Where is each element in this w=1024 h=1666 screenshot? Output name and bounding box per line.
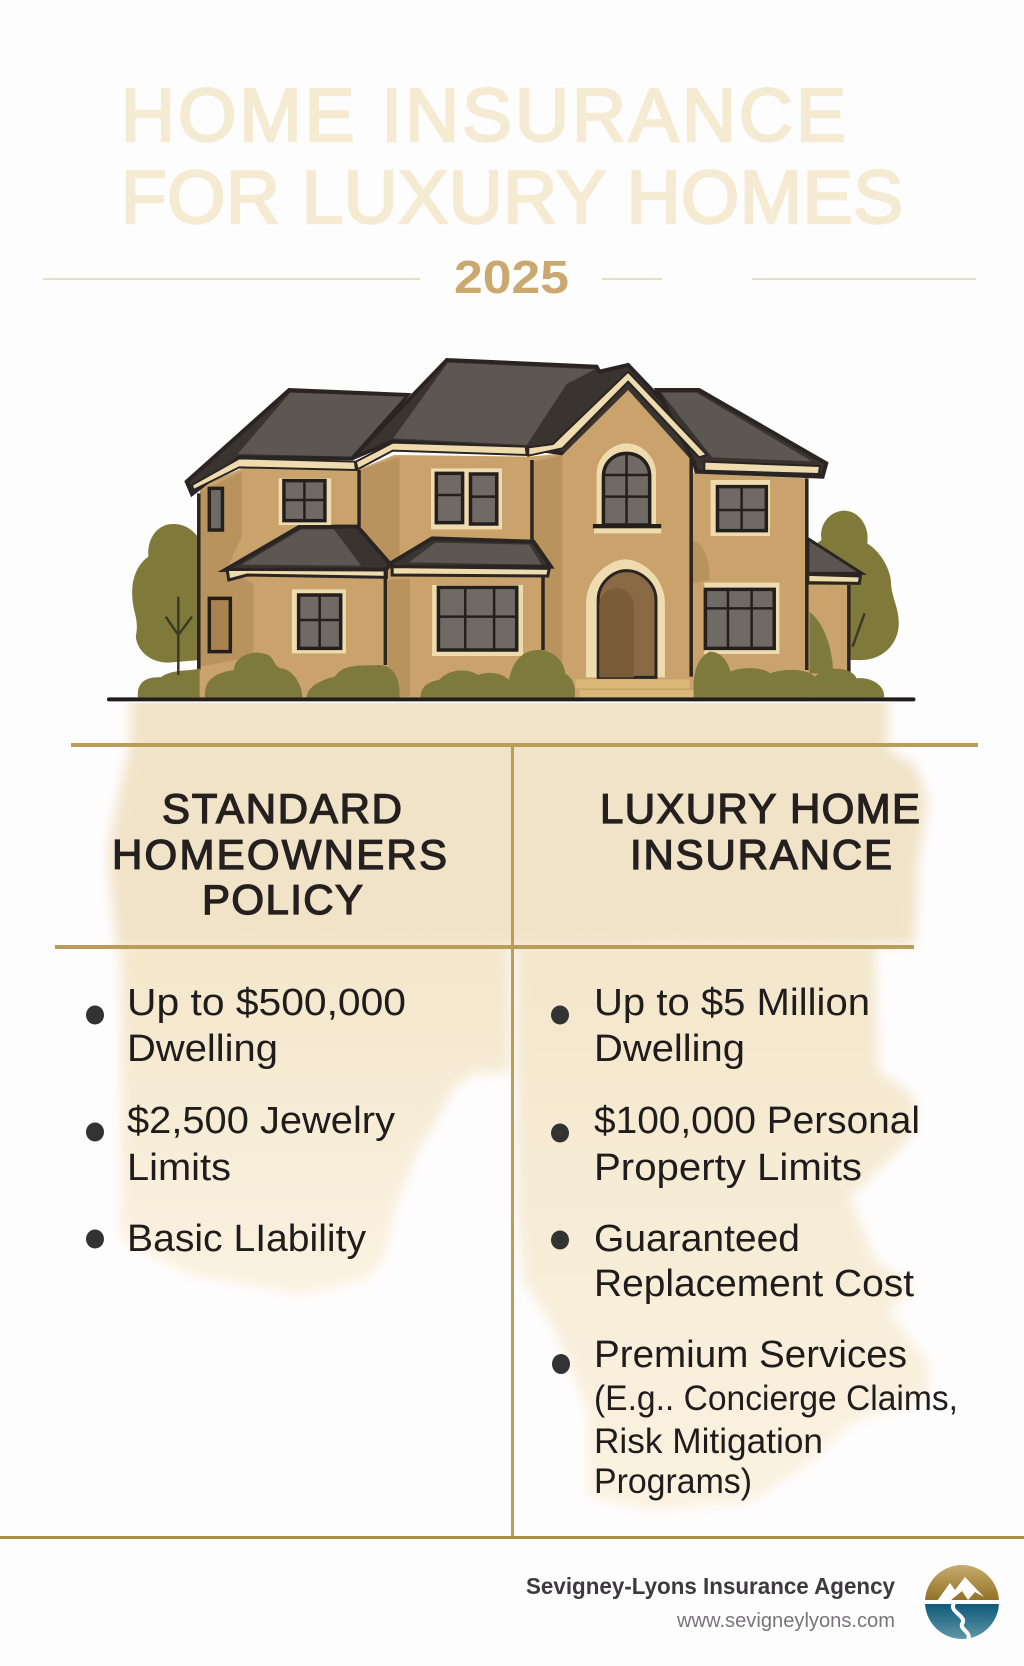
- shrubs: [138, 650, 884, 697]
- cream brush background: [108, 695, 928, 1510]
- right side roof: [808, 539, 862, 573]
- column heading: standard homeowners policy: HOMEOWNERS: [112, 831, 447, 878]
- tree trunks: [166, 597, 865, 675]
- luxury insurance list: Replacement Cost: [594, 1263, 914, 1305]
- column heading: luxury home insurance: LUXURY HOME: [600, 785, 920, 832]
- column heading: luxury home insurance: [600, 785, 920, 878]
- cream window surrounds: [279, 468, 779, 656]
- luxury insurance list: Programs): [594, 1462, 752, 1501]
- lower middle roof: [392, 538, 551, 567]
- column heading: standard homeowners policy: POLICY: [202, 876, 363, 923]
- left tree: [132, 524, 200, 663]
- luxury insurance list: Property Limits: [594, 1147, 862, 1189]
- front door: [586, 559, 665, 677]
- wall shading: [200, 455, 710, 697]
- year subtitle with flanking rules: 2025: [454, 251, 569, 303]
- window muntins: [284, 481, 774, 650]
- gable wall: [562, 390, 691, 677]
- windows: [209, 473, 774, 652]
- footer agency text: Sevigney-Lyons Insurance Agency: [526, 1573, 895, 1599]
- title: FOR LUXURY HOMES: [121, 155, 903, 239]
- standard policy list: Dwelling: [127, 1028, 278, 1070]
- column heading: luxury home insurance: INSURANCE: [630, 831, 892, 878]
- standard policy list: Up to $500,000: [127, 982, 406, 1024]
- roof trim: [192, 372, 820, 490]
- luxury insurance list: Premium Services: [594, 1334, 907, 1376]
- standard policy list: [86, 982, 406, 1260]
- wall outlines: [199, 457, 849, 677]
- standard policy list: Basic LIability: [127, 1218, 366, 1260]
- luxury insurance list: $100,000 Personal: [594, 1100, 920, 1142]
- front steps: [576, 679, 702, 697]
- footer agency text: [526, 1573, 895, 1632]
- luxury insurance list: (E.g.. Concierge Claims,: [594, 1379, 958, 1418]
- luxury insurance list: Risk Mitigation: [594, 1422, 823, 1461]
- title: HOME INSURANCE: [121, 73, 846, 157]
- standard policy list: Limits: [127, 1147, 231, 1189]
- lower left roof: [225, 527, 390, 570]
- house illustration: [109, 360, 913, 699]
- column heading: standard homeowners policy: [112, 785, 447, 923]
- luxury insurance list: [551, 982, 958, 1501]
- comparison table rules: [0, 743, 1024, 1539]
- luxury insurance list: Guaranteed: [594, 1218, 800, 1260]
- left upper roof: [187, 390, 407, 494]
- right tree: [804, 511, 899, 660]
- icon: agency logo: [925, 1565, 999, 1640]
- title: [121, 73, 903, 239]
- footer agency text: www.sevigneylyons.com: [676, 1610, 895, 1632]
- luxury insurance list: Dwelling: [594, 1028, 745, 1070]
- right upper roof: [657, 390, 826, 477]
- walls: [200, 390, 849, 697]
- ground line: [109, 697, 913, 701]
- standard policy list: $2,500 Jewelry: [127, 1100, 395, 1142]
- arched window: [597, 443, 656, 527]
- column heading: standard homeowners policy: STANDARD: [162, 785, 402, 832]
- center upper roof: [352, 360, 712, 462]
- luxury insurance list: Up to $5 Million: [594, 982, 870, 1024]
